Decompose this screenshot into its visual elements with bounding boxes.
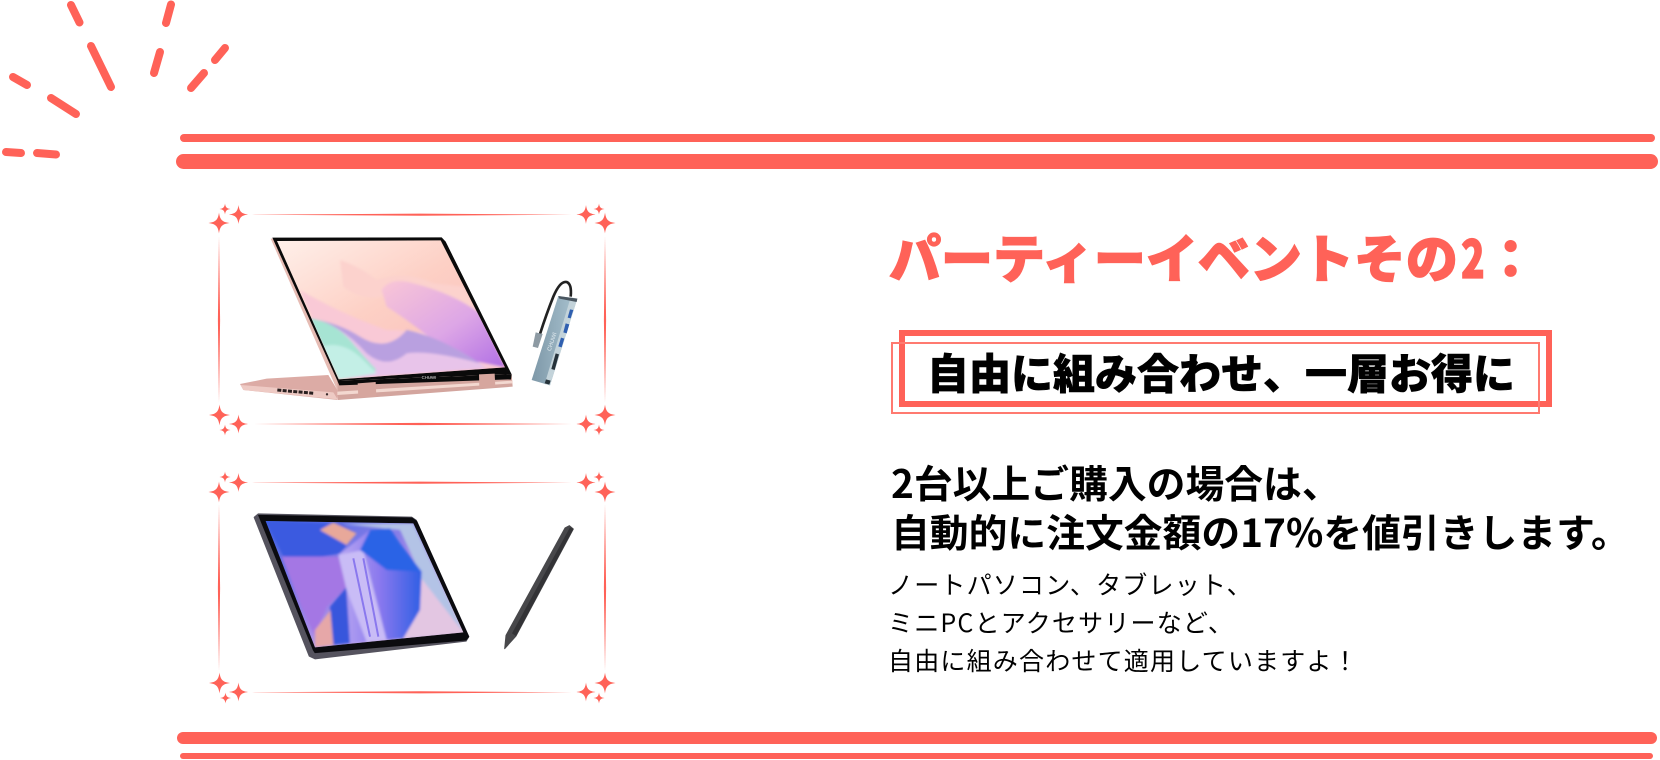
panel: tablet and stylus [208,472,616,704]
thin frame [891,342,1540,414]
text block: details: ノートパソコン、タブレット、 [888,566,1253,602]
text block: discount headline: 自動的に注文金額の17%を値引きします。 [891,502,1630,558]
icon: laptop in tent mode [240,237,513,400]
text block: discount headline [891,454,1630,558]
text block: details: ミニPCとアクセサリーなど、 [888,604,1234,640]
thick frame [899,330,1552,407]
decorative sparkle frame [208,472,616,704]
decorative sparkle frame [208,204,616,436]
icon: USB hub: CHUWI [547,331,559,352]
icon: USB hub [532,282,577,385]
panel: laptop and USB hub [208,204,616,436]
heading: party event 2: パーティーイベントその ： [889,218,1537,293]
subheading text: 自由に組み合わせ、一層お得に [927,341,1515,402]
top double rule [176,134,1658,169]
icon: burst of radiating dashes [2,0,229,158]
callout: framed subheading [891,330,1552,414]
text block: discount headline: 2台以上ご購入の場合は、 [891,454,1341,510]
heading: party event 2: 2 [1461,218,1485,293]
text block: details [888,566,1359,678]
icon: laptop in tent mode: CHUWI [422,375,436,380]
icon: stylus pen [505,526,573,649]
icon: tablet [254,514,469,659]
text block: details: 自由に組み合わせて適用していますよ！ [888,642,1359,678]
bottom double rule [177,732,1657,759]
